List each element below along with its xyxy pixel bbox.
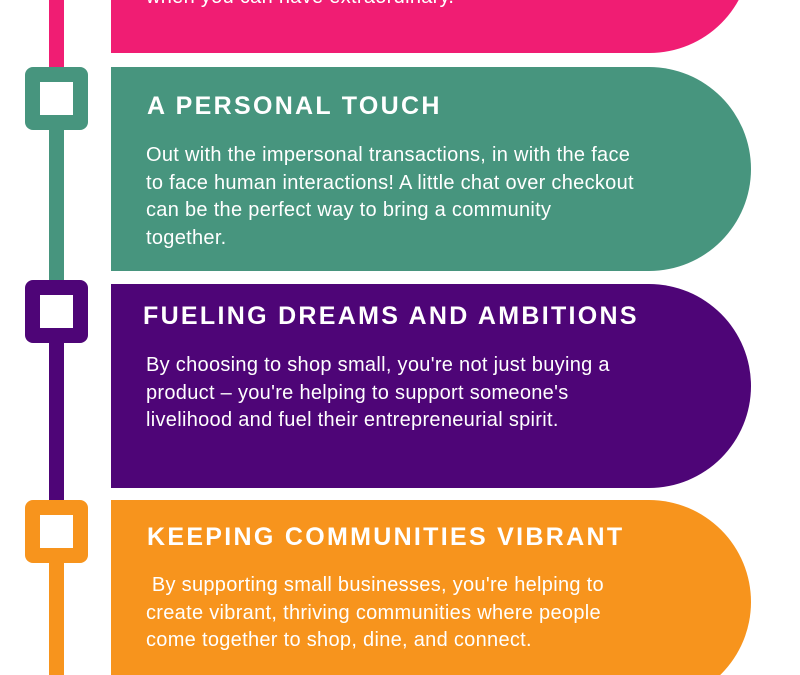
timeline line: purple: [49, 341, 64, 503]
heading: KEEPING COMMUNITIES VIBRANT: [147, 523, 624, 551]
body text: product – you're helping to support someone's: [146, 382, 569, 404]
panel: fueling dreams: [111, 284, 751, 488]
panel: keeping communities vibrant: [111, 500, 751, 675]
body text: [146, 354, 610, 431]
body text: to face human interactions! A little chat over checkout: [146, 172, 634, 194]
body text: together.: [146, 226, 227, 248]
panel: a personal touch: [111, 67, 751, 271]
icon: purple marker: [25, 280, 88, 343]
body text: By supporting small businesses, you're helping to: [152, 574, 604, 596]
icon: green marker: [25, 67, 88, 130]
heading: FUELING DREAMS AND AMBITIONS: [143, 302, 639, 330]
icon: orange marker: [25, 500, 88, 563]
body text: By choosing to shop small, you're not just buying a: [146, 354, 610, 376]
body text: [146, 574, 604, 651]
body text: [146, 144, 634, 248]
panel: pink (partial): [111, 0, 751, 53]
heading: A PERSONAL TOUCH: [147, 92, 442, 120]
body text: can be the perfect way to bring a community: [146, 199, 551, 221]
timeline line: green: [49, 128, 64, 282]
body text: create vibrant, thriving communities where people: [146, 602, 601, 624]
body text: Out with the impersonal transactions, in with the face: [146, 144, 630, 166]
body text: come together to shop, dine, and connect.: [146, 629, 532, 651]
timeline line: pink: [49, 0, 64, 70]
body text: livelihood and fuel their entrepreneurial spirit.: [146, 409, 559, 431]
timeline line: orange: [49, 561, 64, 675]
